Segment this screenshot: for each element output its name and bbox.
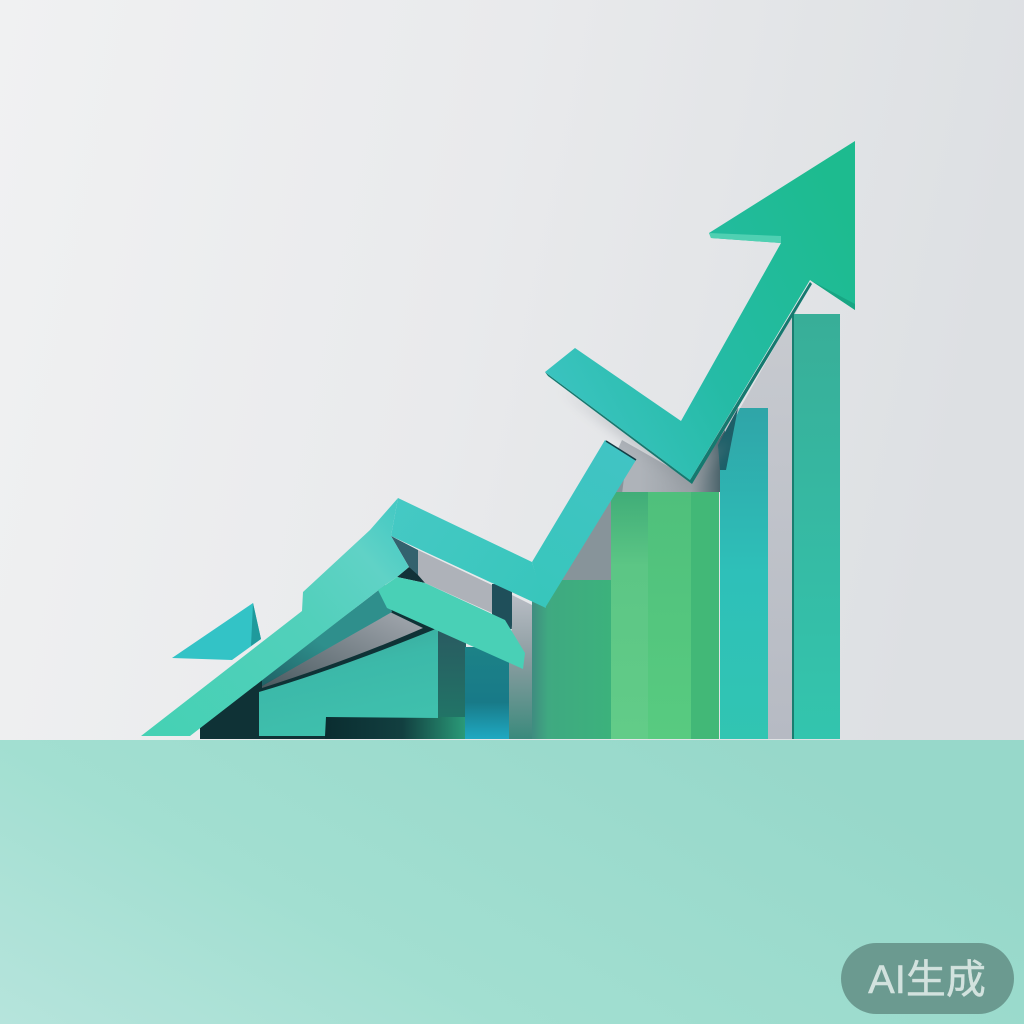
- floor: [0, 740, 1024, 1024]
- big arrow soft shadow: [560, 388, 730, 490]
- roof rafter: [378, 577, 525, 669]
- small triangle shade: [251, 603, 261, 646]
- AI badge: [841, 943, 1014, 1014]
- wedge notch: [391, 536, 418, 578]
- blue column: [465, 647, 509, 739]
- gray backdrop behind bars: [533, 280, 812, 739]
- bar 5: [792, 314, 840, 739]
- teal house shape: [259, 628, 438, 736]
- bar 3: [611, 492, 719, 739]
- AI badge: AI生成: [868, 958, 986, 1002]
- dark slot: [492, 584, 512, 629]
- arrow highlight: [709, 233, 781, 243]
- big arrow lower edge: [545, 282, 812, 484]
- segment top edge: [606, 441, 636, 460]
- growth chart illustration: [141, 141, 855, 739]
- upper gray wall inside house: [418, 550, 492, 613]
- small triangle: [172, 603, 261, 660]
- bar 4: [718, 408, 768, 739]
- rising segment: [532, 440, 636, 608]
- big arrow: [545, 141, 855, 480]
- light side panel: [509, 595, 532, 739]
- dark interior: [200, 590, 465, 739]
- roof strip shadow: [262, 585, 392, 686]
- left rising main band: [141, 498, 409, 736]
- dark panel: [438, 620, 466, 739]
- under house gradient: [325, 717, 465, 739]
- background wall: [0, 0, 1024, 740]
- arrow barb shade: [810, 280, 855, 310]
- bar 2: [532, 580, 612, 739]
- dark gap under wedge: [397, 567, 425, 583]
- gray roof underside: [262, 612, 423, 688]
- middle band: [391, 498, 546, 608]
